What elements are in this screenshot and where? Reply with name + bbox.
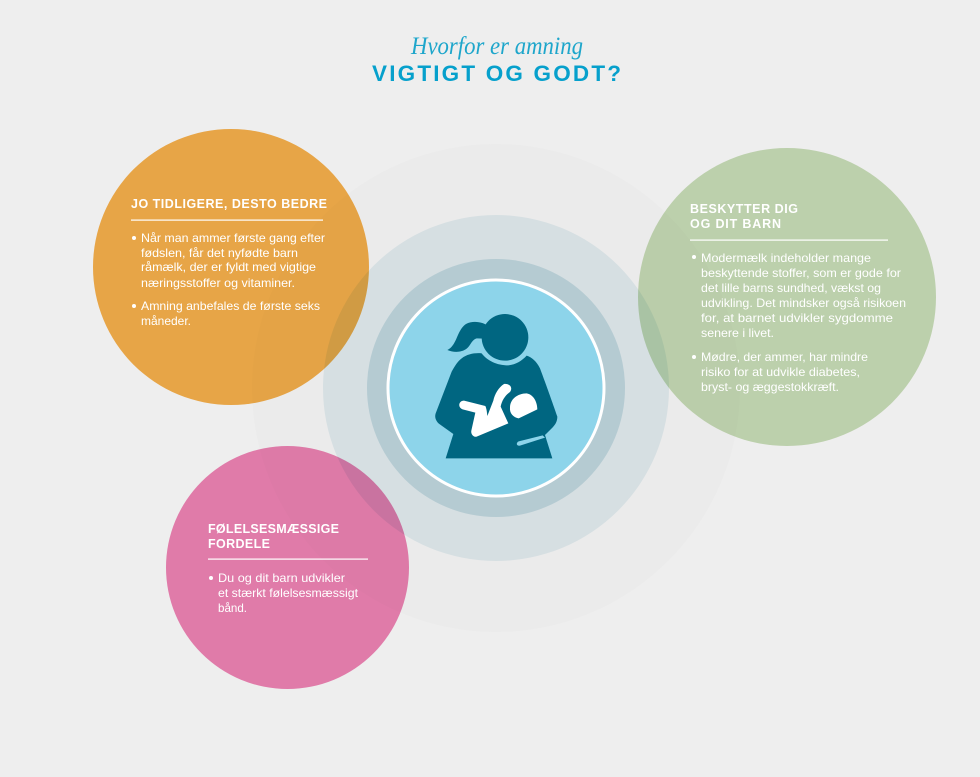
text block: pink bullet: et stærkt følelsesmæssigt [218, 586, 359, 600]
text block: green bullets [692, 251, 906, 394]
text block: orange bullets: Når man ammer første gang efter [141, 231, 325, 245]
text block: green bullets: det lille barns sundhed, vækst og [701, 281, 881, 295]
text block: orange bullets: måneder. [141, 314, 191, 328]
panel: orange circle [93, 129, 369, 405]
title script line: Hvorfor er amning [410, 33, 583, 60]
text block: orange bullets: fødslen, får det nyfødte barn [141, 246, 298, 260]
title [372, 33, 621, 86]
text block: pink bullet: Du og dit barn udvikler [218, 571, 345, 585]
central circle [388, 280, 604, 496]
icon: breastfeeding mother and baby [435, 314, 557, 458]
text block: pink bullet: bånd. [218, 601, 247, 615]
text block: orange bullets: råmælk, der er fyldt med vigtige [141, 260, 316, 274]
text block: orange bullets: Amning anbefales de første seks [141, 299, 320, 313]
text block: green bullets: udvikling. Det mindsker også risikoen [701, 296, 906, 310]
concentric background circles [252, 144, 740, 632]
heading: følelsesmæssige: FØLELSESMÆSSIGE [208, 522, 339, 536]
heading: beskytter [690, 202, 798, 231]
panel: pink circle [166, 446, 409, 689]
heading: beskytter: BESKYTTER DIG [690, 202, 798, 216]
text block: green bullets: senere i livet. [701, 326, 774, 340]
heading: jo tidligere: JO TIDLIGERE, DESTO BEDRE [131, 197, 327, 211]
title bold line: VIGTIGT OG GODT? [372, 61, 621, 86]
text block: green bullets: for, at barnet udvikler sygdomme [701, 311, 893, 325]
text block: green bullets: beskyttende stoffer, som er gode for [701, 266, 901, 280]
text block: green bullets: Modermælk indeholder mange [701, 251, 871, 265]
panel: green circle [638, 148, 936, 446]
heading: følelsesmæssige [208, 522, 339, 551]
text block: pink bullet [209, 571, 359, 615]
text block: green bullets: Mødre, der ammer, har mindre [701, 350, 868, 364]
heading: beskytter: OG DIT BARN [690, 217, 781, 231]
text block: orange bullets [132, 231, 325, 328]
text block: green bullets: risiko for at udvikle diabetes, [701, 365, 860, 379]
text block: green bullets: bryst- og æggestokkræft. [701, 380, 839, 394]
text block: orange bullets: næringsstoffer og vitaminer. [141, 276, 295, 290]
heading: følelsesmæssige: FORDELE [208, 537, 270, 551]
